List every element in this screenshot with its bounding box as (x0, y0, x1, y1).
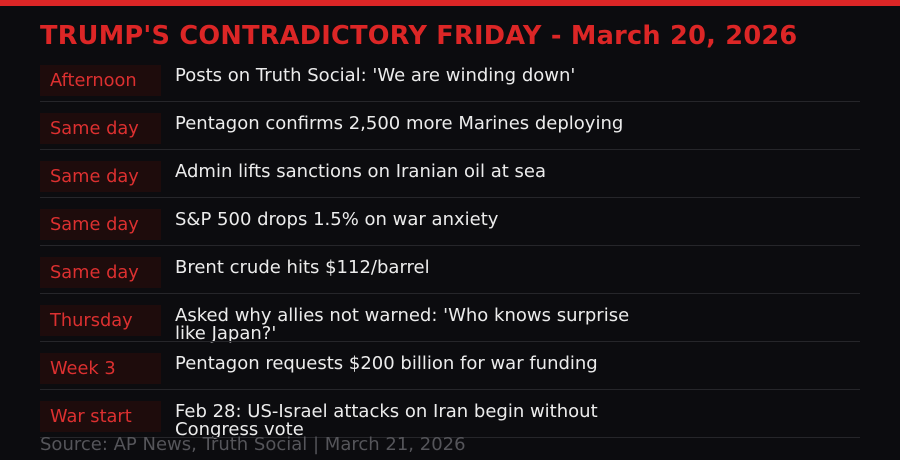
row: thursday (40, 305, 860, 344)
source: Source: AP News, Truth Social | March 21, 2026 (40, 434, 466, 455)
row: week 3: Week 3 (50, 358, 116, 379)
row: marines: Pentagon confirms 2,500 more Marines deploying (175, 113, 623, 134)
row: sanctions: Same day (50, 166, 139, 187)
row: war start: War start (50, 406, 132, 427)
title: TRUMP'S CONTRADICTORY FRIDAY - March 20, 2026 (40, 21, 798, 51)
row: S&P: S&P 500 drops 1.5% on war anxiety (175, 209, 498, 230)
row: S&P (40, 209, 860, 246)
row: week 3 (40, 353, 860, 390)
row: brent: Same day (50, 262, 139, 283)
row: S&P: Same day (50, 214, 139, 235)
row: war start (40, 401, 860, 440)
row: marines: Same day (50, 118, 139, 139)
row: brent: Brent crude hits $112/barrel (175, 257, 430, 278)
row: afternoon: Afternoon (50, 70, 137, 91)
row: war start: Feb 28: US-Israel attacks on Iran begin without Congress vote (175, 401, 598, 440)
row: afternoon (40, 65, 860, 102)
row: sanctions: Admin lifts sanctions on Iranian oil at sea (175, 161, 546, 182)
row: thursday: Asked why allies not warned: 'Who knows surprise like Japan?' (175, 305, 629, 344)
row: sanctions (40, 161, 860, 198)
row: thursday: Thursday (50, 310, 133, 331)
row: week 3: Pentagon requests $200 billion for war funding (175, 353, 598, 374)
row: afternoon: Posts on Truth Social: 'We are winding down' (175, 65, 575, 86)
row: brent (40, 257, 860, 294)
row: marines (40, 113, 860, 150)
